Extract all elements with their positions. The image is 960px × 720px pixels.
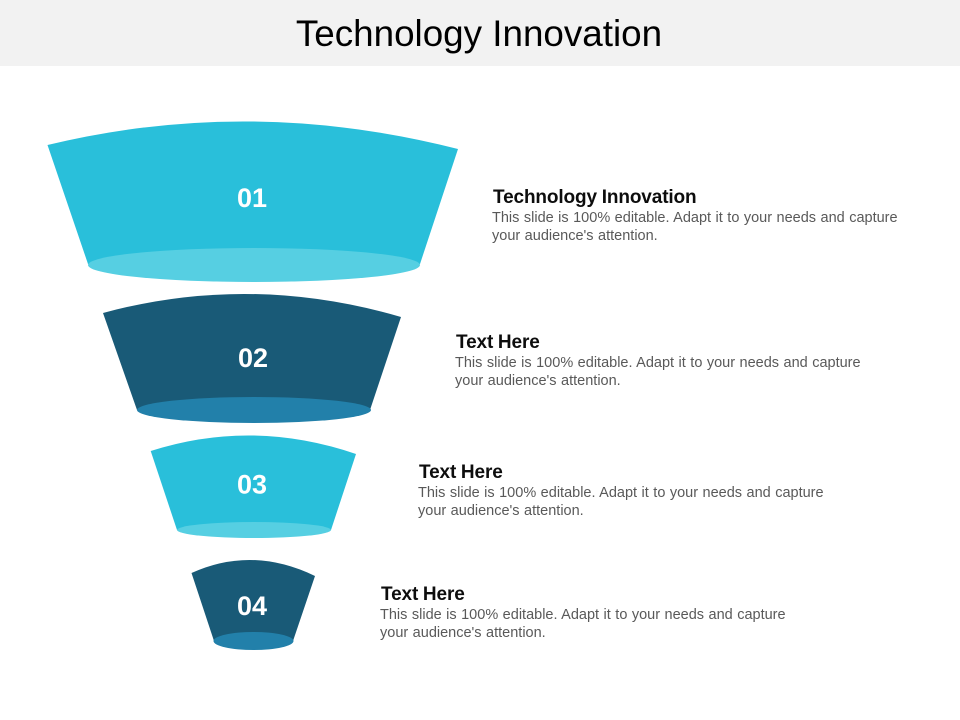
text block 3 — [418, 462, 824, 519]
text block 1: your audience's attention. — [492, 228, 658, 244]
text block 1: This slide is 100% editable. Adapt it to your needs and capture — [492, 210, 898, 226]
text block 4: This slide is 100% editable. Adapt it to your needs and capture — [380, 607, 786, 623]
text block 4 — [380, 584, 786, 641]
text block 2: This slide is 100% editable. Adapt it to your needs and capture — [455, 355, 861, 371]
title: Technology Innovation — [296, 13, 662, 54]
text block 1: Technology Innovation — [493, 187, 697, 208]
text block 4: Text Here — [381, 584, 465, 605]
text block 1 — [492, 187, 898, 244]
funnel tier 03 — [151, 435, 356, 538]
text block 2: Text Here — [456, 332, 540, 353]
funnel tier 04: 04 — [237, 591, 267, 621]
funnel tier 03: 03 — [237, 470, 267, 500]
funnel tier 02 — [103, 294, 401, 423]
text block 2: your audience's attention. — [455, 373, 621, 389]
text block 3: Text Here — [419, 462, 503, 483]
funnel tier 01 — [48, 121, 458, 282]
funnel tier 02: 02 — [238, 343, 268, 373]
text block 3: This slide is 100% editable. Adapt it to your needs and capture — [418, 485, 824, 501]
header band — [0, 0, 960, 66]
funnel tier 04 — [192, 560, 315, 650]
text block 4: your audience's attention. — [380, 625, 546, 641]
text block 2 — [455, 332, 861, 389]
funnel tier 01: 01 — [237, 183, 267, 213]
text block 3: your audience's attention. — [418, 503, 584, 519]
